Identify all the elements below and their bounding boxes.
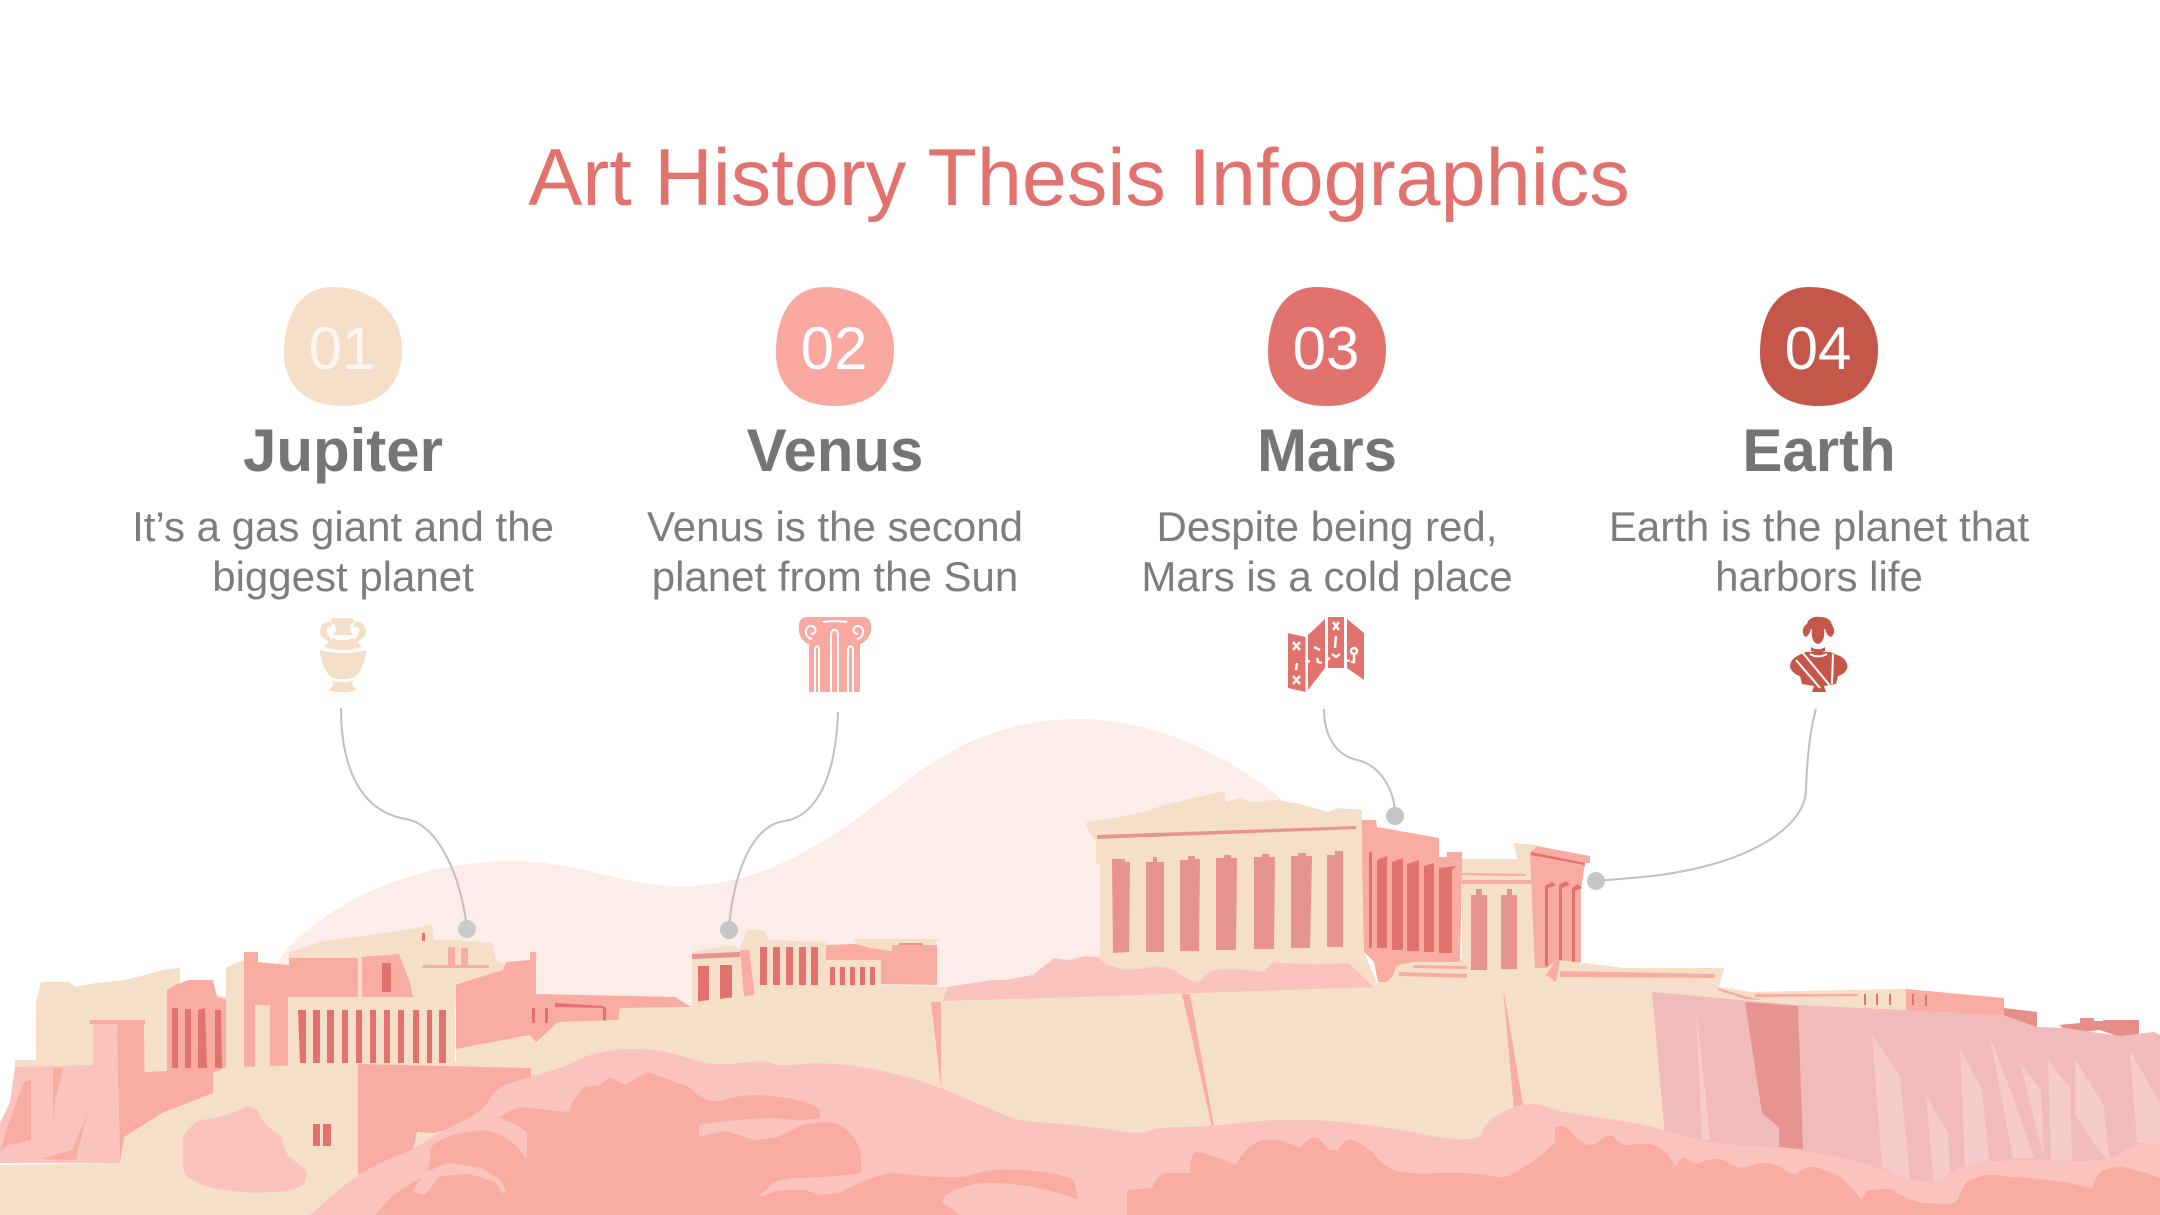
badge 02: 02 [801, 315, 867, 382]
right plateau details [931, 960, 1724, 1127]
dot 2 [720, 921, 738, 939]
foreground hill dark right [1127, 1126, 2160, 1215]
parthenon side and rear wing [1356, 820, 1462, 982]
title: Art History Thesis Infographics [528, 133, 1630, 223]
badge 02 [776, 287, 894, 406]
dot 4 [1587, 872, 1605, 890]
dot 3 [1386, 807, 1404, 825]
small temple [692, 930, 940, 1010]
parthenon front [1085, 791, 1378, 985]
heading: Earth [1742, 417, 1896, 484]
badge 04: 04 [1785, 315, 1851, 382]
foreground hill dark left [375, 1072, 1078, 1215]
description: It’s a gas giant and the [132, 503, 554, 550]
cliff right [1560, 968, 2160, 1215]
badge 03 [1268, 287, 1386, 406]
left back building [15, 968, 240, 1085]
heading: Venus [747, 417, 923, 484]
connector 2 [729, 712, 838, 930]
foreground streak [412, 1163, 507, 1195]
column: Earth [1609, 287, 2029, 692]
column: Jupiter [132, 287, 554, 692]
connector 4 [1596, 709, 1816, 881]
icon: treasure map [1288, 617, 1364, 692]
low building [523, 994, 691, 1043]
dot 1 [458, 920, 476, 938]
description: harbors life [1715, 553, 1923, 600]
bush [183, 1106, 307, 1193]
window bars [313, 1124, 331, 1146]
description: biggest planet [212, 553, 474, 600]
description: Venus is the second [647, 503, 1023, 550]
illustration: acropolis landscape [0, 719, 2160, 1215]
badge 03: 03 [1293, 315, 1359, 382]
pink terrace wall [358, 1064, 531, 1175]
foreground hill light [310, 1049, 2160, 1215]
connector 1 [341, 708, 467, 930]
description: Despite being red, [1157, 503, 1497, 550]
hill below parthenon [943, 956, 1374, 1001]
description: Earth is the planet that [1609, 503, 2029, 550]
description: Mars is a cold place [1141, 553, 1513, 600]
column: Mars [1141, 287, 1513, 692]
icon: roman bust [1790, 617, 1847, 692]
column: Venus [647, 287, 1023, 692]
badge 01: 01 [309, 315, 375, 382]
left main building upper [226, 925, 536, 1070]
badge 04 [1760, 287, 1878, 406]
background hill [279, 719, 1300, 1010]
propylaea [1462, 843, 1590, 975]
heading: Jupiter [243, 417, 443, 484]
icon: vase [320, 618, 366, 692]
plateau [0, 958, 1906, 1215]
heading: Mars [1257, 417, 1397, 484]
badge 01 [284, 287, 402, 406]
connector 3 [1324, 709, 1395, 815]
icon: ionic column [799, 617, 871, 692]
left tower and cliff [0, 1020, 213, 1163]
left front building [288, 968, 475, 1067]
description: planet from the Sun [652, 553, 1018, 600]
